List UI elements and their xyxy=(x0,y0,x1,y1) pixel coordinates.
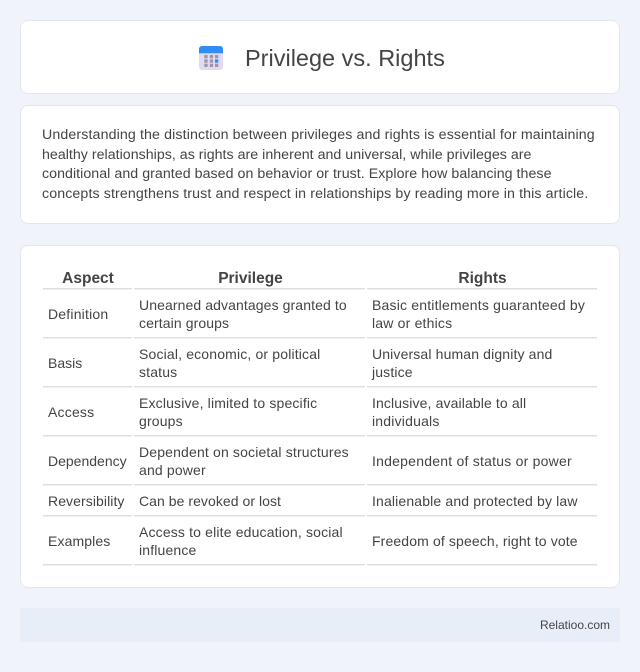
row: basis: status xyxy=(139,364,177,380)
column headings xyxy=(43,270,597,290)
row: access: Access xyxy=(48,404,94,420)
row: reversibility: Reversibility xyxy=(48,493,125,509)
row: definition: Basic entitlements guaranteed by xyxy=(372,297,585,313)
row: examples: influence xyxy=(139,542,196,558)
intro text: healthy relationships, as rights are inherent and universal, while privileges are xyxy=(42,146,531,162)
row: definition: Unearned advantages granted to xyxy=(139,297,347,313)
row: dependency: Independent of status or power xyxy=(372,453,572,469)
row: dependency xyxy=(43,444,597,486)
row: basis: Social, economic, or political xyxy=(139,346,320,362)
row: examples: Freedom of speech, right to vote xyxy=(372,533,578,549)
row: basis: Basis xyxy=(48,355,82,371)
row: reversibility: Inalienable and protected by law xyxy=(372,493,578,509)
row: reversibility xyxy=(43,493,597,517)
row: definition: Definition xyxy=(48,306,108,322)
row: access xyxy=(43,395,597,437)
footer credit: Relatioo.com xyxy=(540,618,610,632)
header panel xyxy=(20,20,620,94)
intro text: concepts strengthens trust and respect in relationships by reading more in this article. xyxy=(42,186,588,202)
intro text: Understanding the distinction between privileges and rights is essential for maintaining xyxy=(42,127,595,143)
title: Privilege vs. Rights xyxy=(245,45,445,71)
row: reversibility: Can be revoked or lost xyxy=(139,493,281,509)
comparison table panel xyxy=(20,245,620,588)
row: definition: law or ethics xyxy=(372,315,452,331)
footer bar xyxy=(20,608,620,642)
column headings: Aspect xyxy=(62,270,114,287)
intro panel xyxy=(20,105,620,224)
row: examples: Access to elite education, social xyxy=(139,524,343,540)
row: dependency: Dependency xyxy=(48,453,127,469)
row: access: groups xyxy=(139,413,183,429)
intro text xyxy=(42,127,595,202)
row: basis xyxy=(43,346,597,388)
row: definition: certain groups xyxy=(139,315,229,331)
column headings: Privilege xyxy=(218,270,283,287)
row: access: Inclusive, available to all xyxy=(372,395,526,411)
row: examples xyxy=(43,524,597,566)
row: access: individuals xyxy=(372,413,440,429)
intro text: conditional and granted based on behavior or trust. Explore how balancing these xyxy=(42,166,552,182)
row: definition xyxy=(43,297,597,339)
icon: calendar xyxy=(199,46,223,70)
row: basis: justice xyxy=(372,364,413,380)
row: basis: Universal human dignity and xyxy=(372,346,552,362)
row: examples: Examples xyxy=(48,533,110,549)
row: access: Exclusive, limited to specific xyxy=(139,395,317,411)
row: dependency: Dependent on societal structures xyxy=(139,444,349,460)
row: dependency: and power xyxy=(139,462,206,478)
column headings: Rights xyxy=(458,270,507,287)
